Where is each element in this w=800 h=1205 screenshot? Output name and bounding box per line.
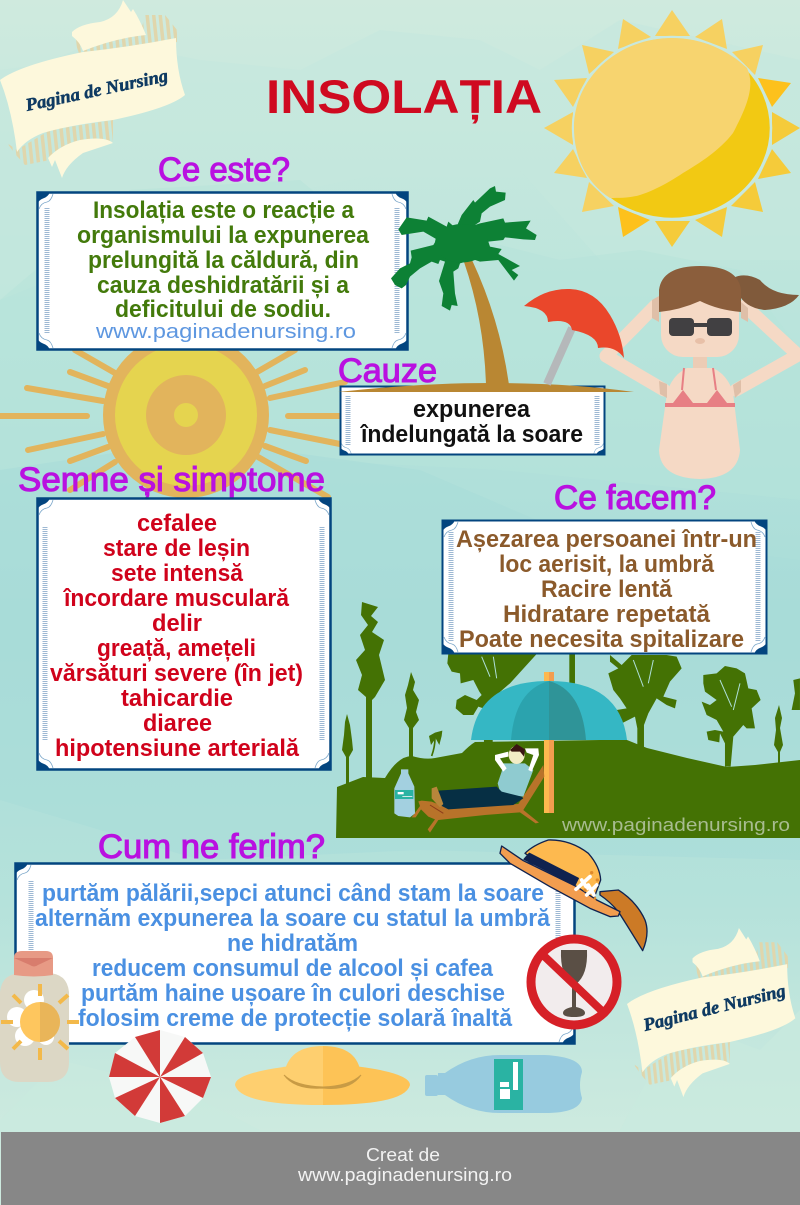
icon: big sun [544, 10, 800, 247]
title: INSOLAȚIA [266, 70, 542, 124]
heading: semne si simptome: Semne și simptome [18, 461, 325, 499]
text: symptoms list: diaree [143, 710, 212, 737]
icon: decorative sun with rays [0, 332, 345, 498]
text: prevention: ne hidratăm [227, 930, 358, 957]
trees [342, 602, 800, 788]
text: symptoms list: încordare musculară [63, 585, 290, 612]
website watermark: www.paginadenursing.ro [561, 815, 790, 835]
text: what to do: Racire lentă [541, 576, 673, 603]
text: symptoms list: greață, amețeli [97, 635, 256, 662]
text: prevention: reducem consumul de alcool și cafea [92, 955, 494, 982]
text: causes [360, 396, 583, 448]
icon: girl in bikini [606, 266, 799, 479]
text: prevention: purtăm pălării,sepci atunci când stam la soare [42, 880, 544, 907]
icon: striped beach umbrella top view [109, 1030, 211, 1123]
text: what to do: Așezarea persoanei într-un [456, 526, 757, 553]
icon: water bottle lying [425, 1055, 582, 1113]
text: website: www.paginadenursing.ro [95, 321, 356, 343]
text: causes: expunerea [413, 396, 531, 423]
text: definition: prelungită la căldură, din [88, 247, 359, 274]
text: prevention [35, 880, 551, 1032]
icon: red parasol [524, 289, 624, 384]
icon: palm tree on island [338, 186, 634, 392]
text: symptoms list: stare de leșin [103, 535, 250, 562]
panel: semne si simptome [37, 498, 331, 770]
icon: hat with flowers [500, 840, 647, 951]
panel: cum ne ferim [15, 863, 575, 1044]
text: symptoms list: hipotensiune arterială [55, 735, 300, 762]
footer text: Creat de [366, 1145, 440, 1165]
banner bottom right: Pagina de Nursing [640, 980, 788, 1035]
text: prevention: alternăm expunerea la soare cu statul la umbră [35, 905, 551, 932]
text: definition [77, 197, 370, 323]
text: what to do [456, 526, 757, 653]
small palm [429, 731, 442, 756]
text: prevention: folosim creme de protecție solară înaltă [78, 1005, 513, 1032]
panel: ce facem [442, 520, 767, 654]
text: what to do: loc aerisit, la umbră [499, 551, 715, 578]
banner top left [0, 0, 185, 178]
water bottle [394, 769, 415, 817]
text: definition: cauza deshidratării și a [97, 272, 350, 299]
text: symptoms list: sete intensă [111, 560, 244, 587]
text: symptoms list: delir [152, 610, 202, 637]
panel: ce este [37, 192, 408, 350]
heading: ce facem: Ce facem? [554, 479, 716, 517]
banner bottom right [627, 928, 795, 1097]
icon: no alcohol sign [531, 939, 617, 1025]
heading: ce este: Ce este? [158, 151, 290, 189]
text: symptoms list [50, 510, 303, 762]
footer [1, 1132, 800, 1205]
text: causes: îndelungată la soare [360, 421, 583, 448]
icon: straw hat [235, 1046, 410, 1105]
text: what to do: Hidratare repetată [503, 601, 711, 628]
text: definition: organismului la expunerea [77, 222, 370, 249]
heading: cauze: Cauze [338, 352, 437, 390]
banner top left: Pagina de Nursing [23, 65, 170, 115]
panel: cauze [340, 386, 605, 455]
footer text: www.paginadenursing.ro [297, 1165, 512, 1185]
footer text [297, 1145, 512, 1185]
text: prevention: purtăm haine ușoare în culori deschise [81, 980, 505, 1007]
text: symptoms list: vărsături severe (în jet) [50, 660, 303, 687]
text: definition: Insolația este o reacție a [93, 197, 355, 224]
icon: sunscreen bottle [0, 951, 79, 1082]
text: what to do: Poate necesita spitalizare [459, 626, 744, 653]
text: symptoms list: tahicardie [121, 685, 233, 712]
man on lounger [412, 744, 544, 833]
umbrella [471, 672, 627, 813]
heading: cum ne ferim: Cum ne ferim? [98, 828, 325, 866]
text: definition: deficitului de sodiu. [115, 296, 331, 323]
illustration: landscape with man under umbrella [336, 602, 800, 838]
text: symptoms list: cefalee [137, 510, 217, 537]
